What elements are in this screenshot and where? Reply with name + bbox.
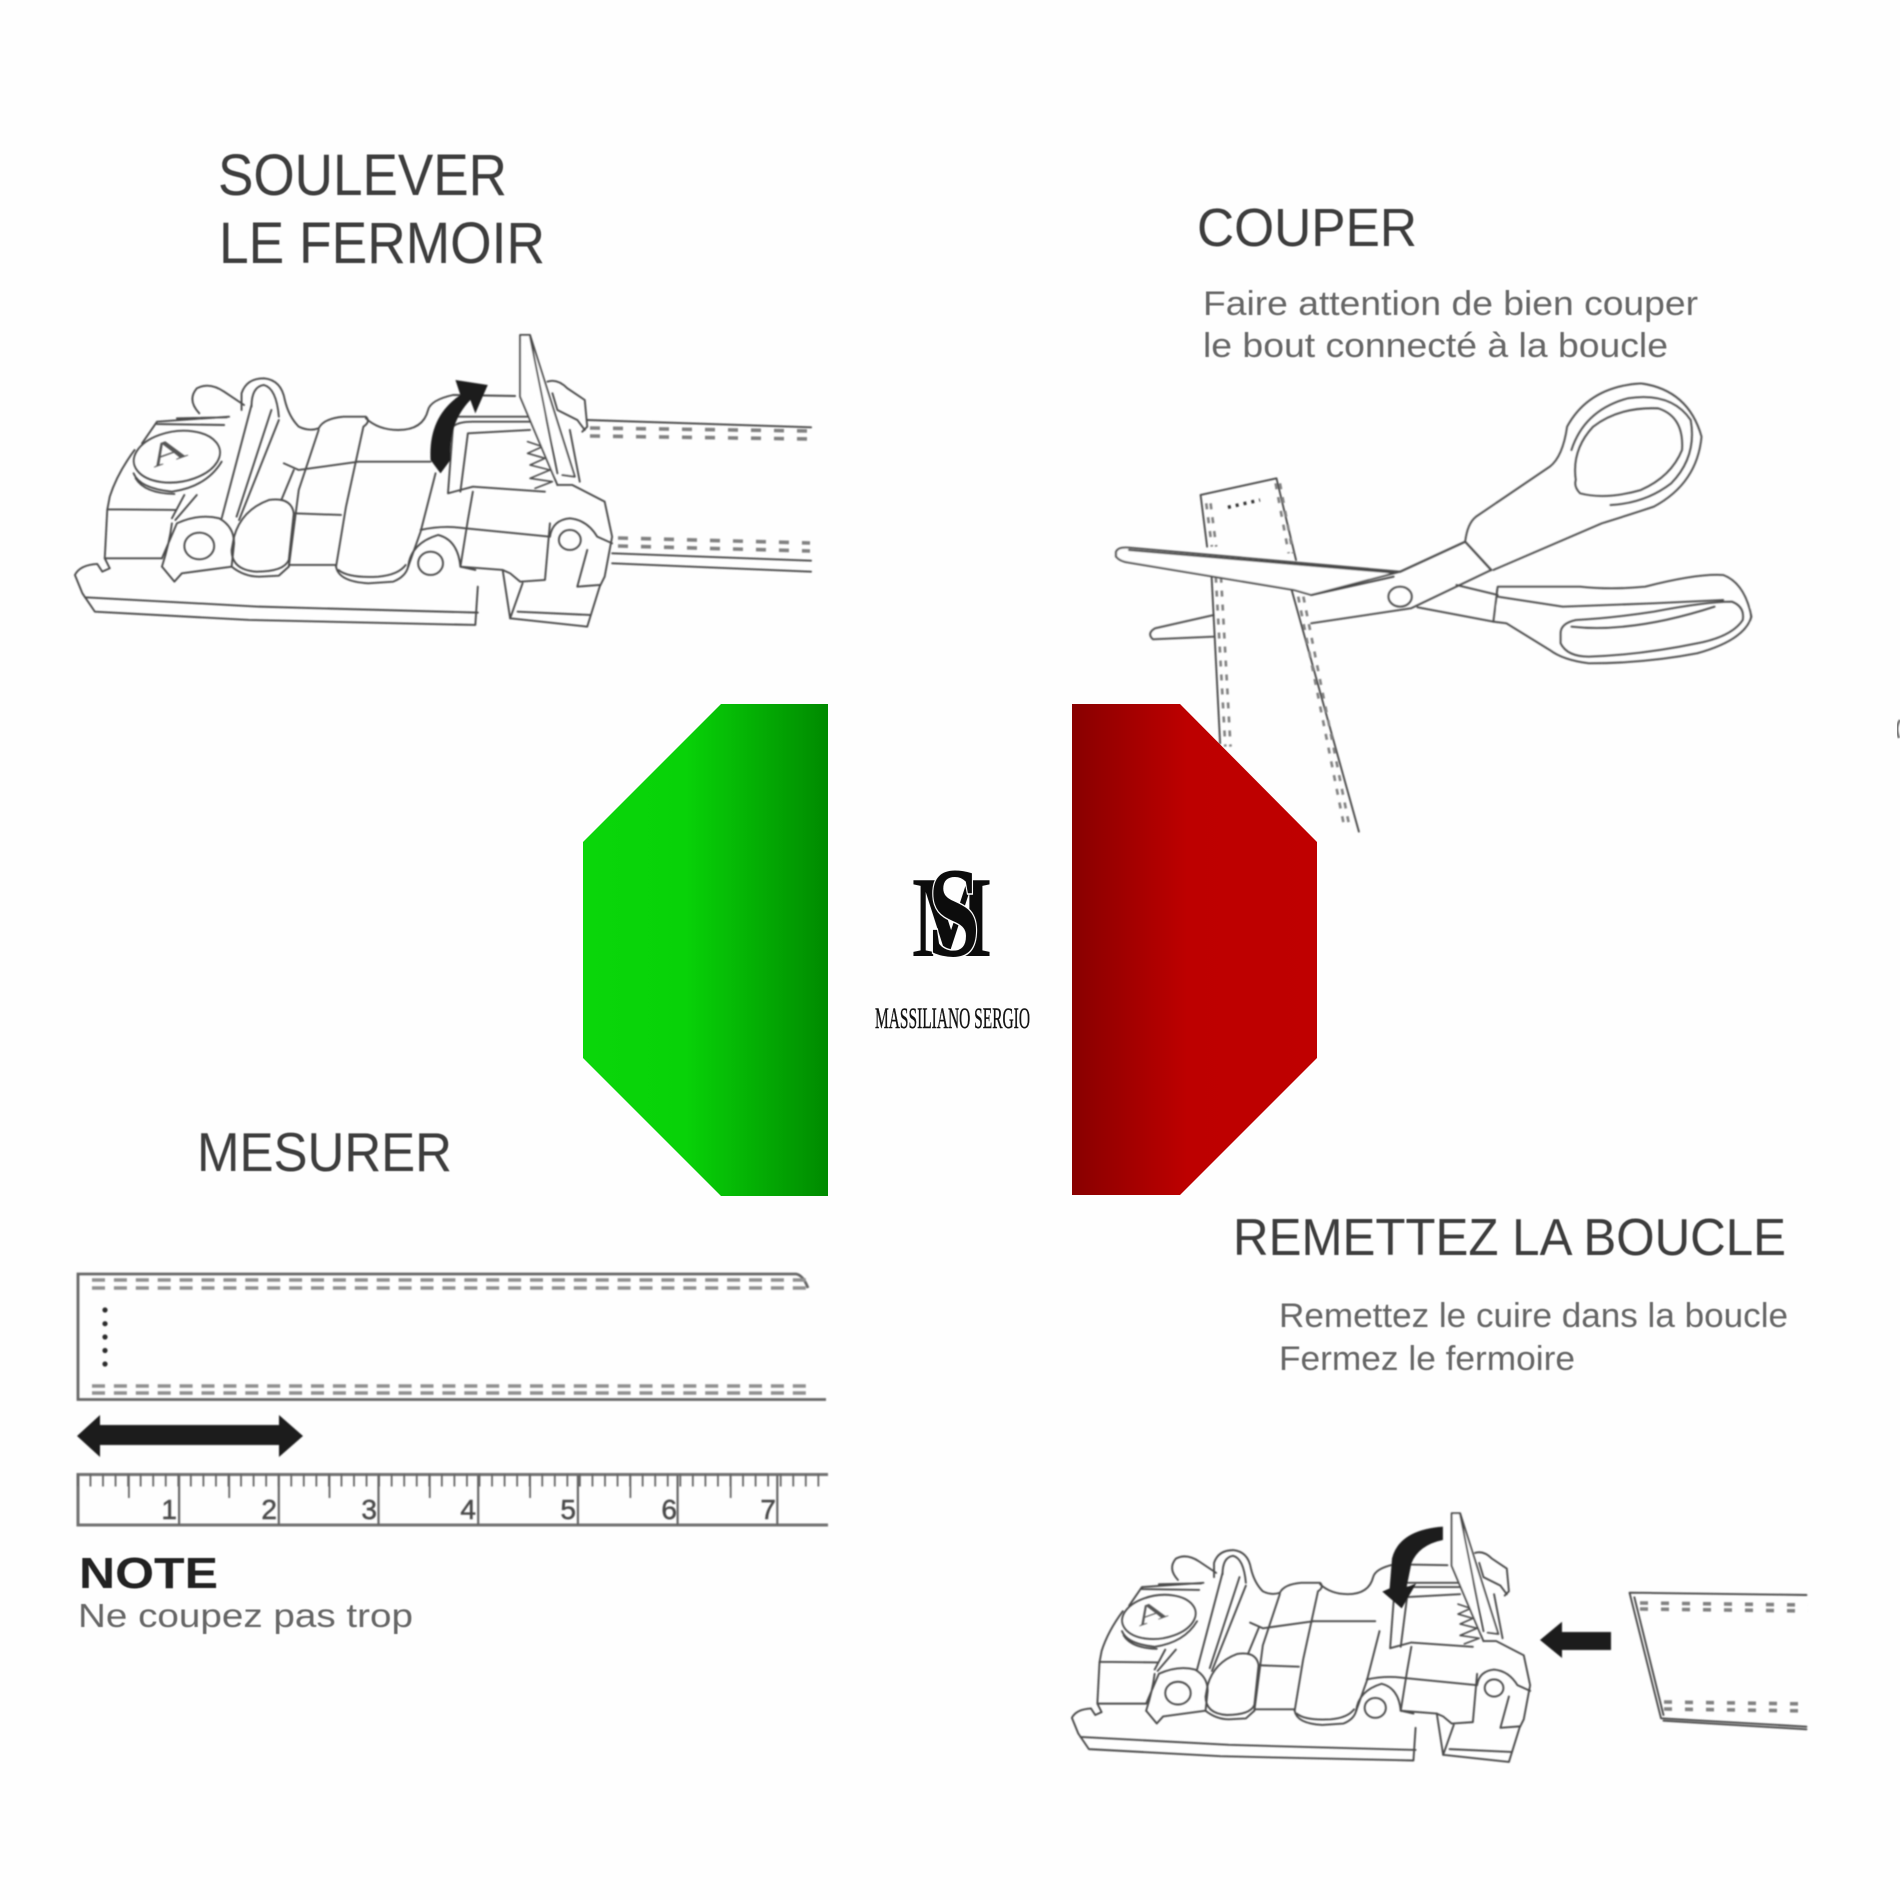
- heading: soulever le fermoir: LE FERMOIR: [219, 211, 545, 276]
- illustration: belt end to measure: [78, 1274, 826, 1400]
- belt strip: [1201, 478, 1359, 832]
- scissors: [1116, 383, 1751, 663]
- panel: green flag shape: [583, 704, 828, 1196]
- belt holes: [102, 1307, 108, 1367]
- text: remettez instructions: Fermez le fermoire: [1279, 1340, 1575, 1378]
- ruler numbers: 5: [560, 1494, 576, 1525]
- belt strap behind buckle: [587, 420, 811, 572]
- heading: mesurer: MESURER: [197, 1121, 452, 1183]
- heading: soulever le fermoir: [218, 143, 545, 276]
- illustration: scissors cutting belt: [1116, 383, 1751, 832]
- arrow: close clasp: [1382, 1527, 1443, 1608]
- illustration: buckle with lifted clasp: [75, 335, 811, 627]
- ruler numbers: 3: [361, 1494, 377, 1525]
- text: remettez instructions: Remettez le cuire dans la boucle: [1279, 1297, 1788, 1335]
- text: couper instructions: Faire attention de bien couper: [1203, 285, 1698, 323]
- ruler numbers: 2: [261, 1494, 277, 1525]
- belt end: [1630, 1593, 1808, 1729]
- note text: Ne coupez pas trop: [78, 1597, 413, 1634]
- ruler: [77, 1474, 828, 1525]
- text: couper instructions: [1203, 285, 1698, 365]
- heading: remettez la boucle: REMETTEZ LA BOUCLE: [1233, 1209, 1786, 1267]
- logo: monogram MS: M: [912, 854, 992, 981]
- ruler numbers: [161, 1494, 776, 1525]
- arrow: insert belt: [1540, 1622, 1611, 1658]
- ruler numbers: 7: [760, 1494, 776, 1525]
- illustration: buckle being closed: [1072, 1513, 1808, 1762]
- ruler numbers: 6: [661, 1494, 677, 1525]
- text: remettez instructions: [1279, 1297, 1788, 1378]
- heading: soulever le fermoir: SOULEVER: [218, 143, 507, 208]
- buckle drawing: [75, 335, 612, 627]
- text: couper instructions: le bout connecté à la boucle: [1203, 327, 1668, 365]
- ruler numbers: 4: [460, 1494, 476, 1525]
- buckle drawing: A: [135, 432, 193, 474]
- arrow: measure length: [77, 1415, 303, 1457]
- heading: couper: COUPER: [1197, 198, 1417, 258]
- panel: red flag shape: [1072, 704, 1317, 1195]
- logo: monogram MS: S: [928, 842, 980, 984]
- buckle drawing: [1072, 1513, 1530, 1762]
- ruler numbers: 1: [161, 1494, 177, 1525]
- logo text: brand name: MASSILIANO SERGIO: [875, 1002, 1030, 1035]
- stray mark at right edge: [1897, 720, 1900, 738]
- arrow: lift up: [430, 380, 488, 473]
- note heading: NOTE: [79, 1549, 218, 1598]
